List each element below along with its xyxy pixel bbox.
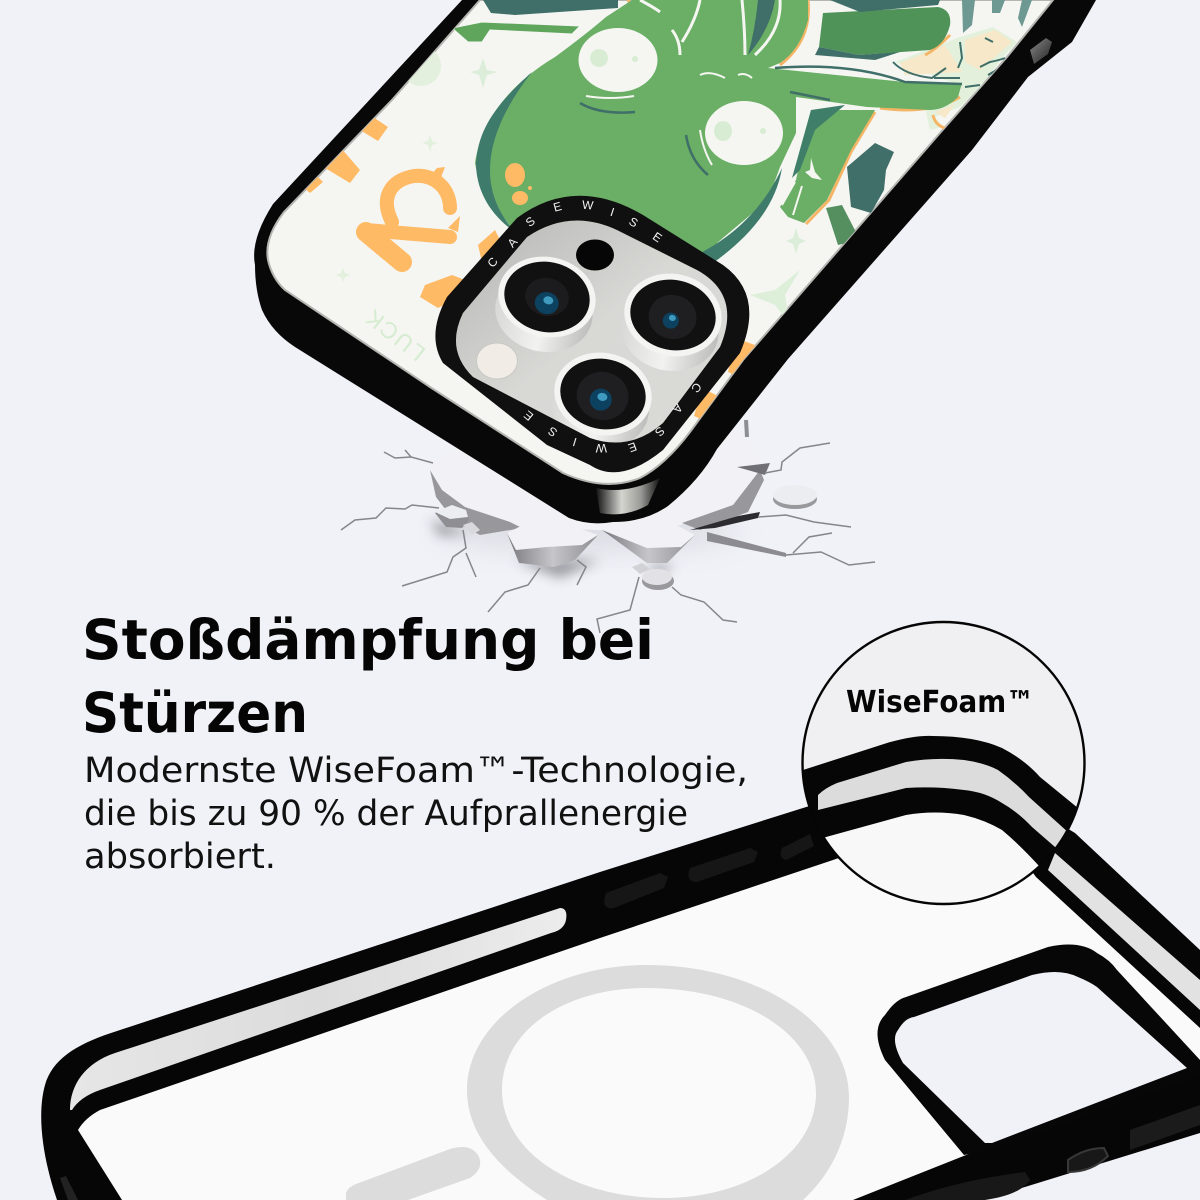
dark tentacle stripe [748,0,775,55]
eye wrinkles [586,73,752,165]
body text: die bis zu 90 % der Aufprallenergie [84,794,688,834]
bottom button [905,1172,1030,1200]
callout label: WiseFoam™ [846,685,1034,720]
body shading lower right [702,168,782,261]
orange lettering [304,115,755,424]
body text [84,751,748,877]
heading: Stoßdämpfung bei [82,608,654,672]
small lower leaf [826,205,856,245]
black bumper [254,0,1096,523]
camera plate [456,221,727,443]
hand finger lines [782,182,802,215]
body text: absorbiert. [84,837,276,877]
upper right tentacle [819,7,950,55]
pale star: upper left [470,58,498,88]
small creature arm [452,22,580,42]
right broken edge [682,470,764,530]
microphone hole [576,240,614,270]
hand star [805,158,822,180]
arm dark line [775,67,962,100]
camera ring [435,196,749,472]
pale star: small left [422,136,438,152]
black frame [41,776,1200,1200]
camera module [435,196,749,472]
lens bottom [544,344,659,457]
pale star: small right [786,228,806,254]
impact crater: cracked wall [341,420,875,633]
pale details [893,38,1005,87]
ring lettering bottom: CASEWISE [521,380,705,455]
magnified black frame [804,736,1076,866]
bumper corner highlight [596,478,660,514]
left broken edge [430,470,522,535]
transparent case, inside view [41,776,1200,1200]
pale star: lower right [750,270,800,315]
bottom port [1068,1148,1108,1172]
magnified foam gap [818,758,1066,848]
lens top left [488,248,603,361]
side buttons [604,834,814,908]
hand shadow [792,105,845,178]
left small chunk [435,505,480,535]
foam gap right [1048,853,1200,1010]
pale background pattern [895,27,1017,130]
orange outline strokes [628,0,960,224]
artwork [304,0,1032,424]
eye right [705,101,783,165]
clear back panel [78,822,1200,1200]
centre-left chunk [507,527,598,567]
crack lines [341,420,875,633]
magnet alignment bar [346,1147,480,1200]
orange spots [505,163,525,187]
crater shadow [440,510,740,550]
right dark wedge [690,512,760,530]
heading [82,608,654,745]
octopus body [475,0,962,300]
chunk shadows [430,520,675,578]
orange halftone [900,30,1012,118]
body text: Modernste WiseFoam™-Technologie, [84,751,748,791]
flash [476,343,518,379]
heading: Stürzen [82,681,308,745]
pale circle [408,52,441,86]
hand [780,110,875,223]
crater rim plates [430,430,770,530]
centre-right chunk [602,520,695,563]
foam gap left [70,908,566,1110]
right crack wedge [707,532,786,557]
callout disc [802,622,1084,904]
pale star: small lower left [336,268,350,282]
teal streaks [962,0,1032,33]
teal leaf [847,143,894,213]
camera cutout frame [878,945,1200,1155]
camera cutout window [895,972,1187,1143]
side button [1030,38,1052,64]
magnified frame [804,736,1076,866]
ring lettering top: CASEWISE [484,198,665,270]
teal tentacle stripe [815,0,940,60]
LUCK lettering: LUCK [359,303,430,367]
body shading left [476,72,532,232]
callout outline [802,622,1084,904]
tentacle white lines [640,0,780,55]
lens right [613,265,729,380]
teal shard top left [483,0,618,15]
right small chunk [773,485,817,509]
case back panel [267,0,1053,484]
eye left [578,28,658,92]
bottom grip texture [1130,1105,1200,1150]
WiseFoam callout magnifier [801,620,1086,906]
phone with green octopus case [254,0,1096,523]
bottom-left slot [60,1176,78,1200]
magnet ring [467,965,849,1200]
magnified clear panel [825,812,1038,903]
upper-right gray wedge [737,463,770,475]
lower small chunk [632,563,674,590]
